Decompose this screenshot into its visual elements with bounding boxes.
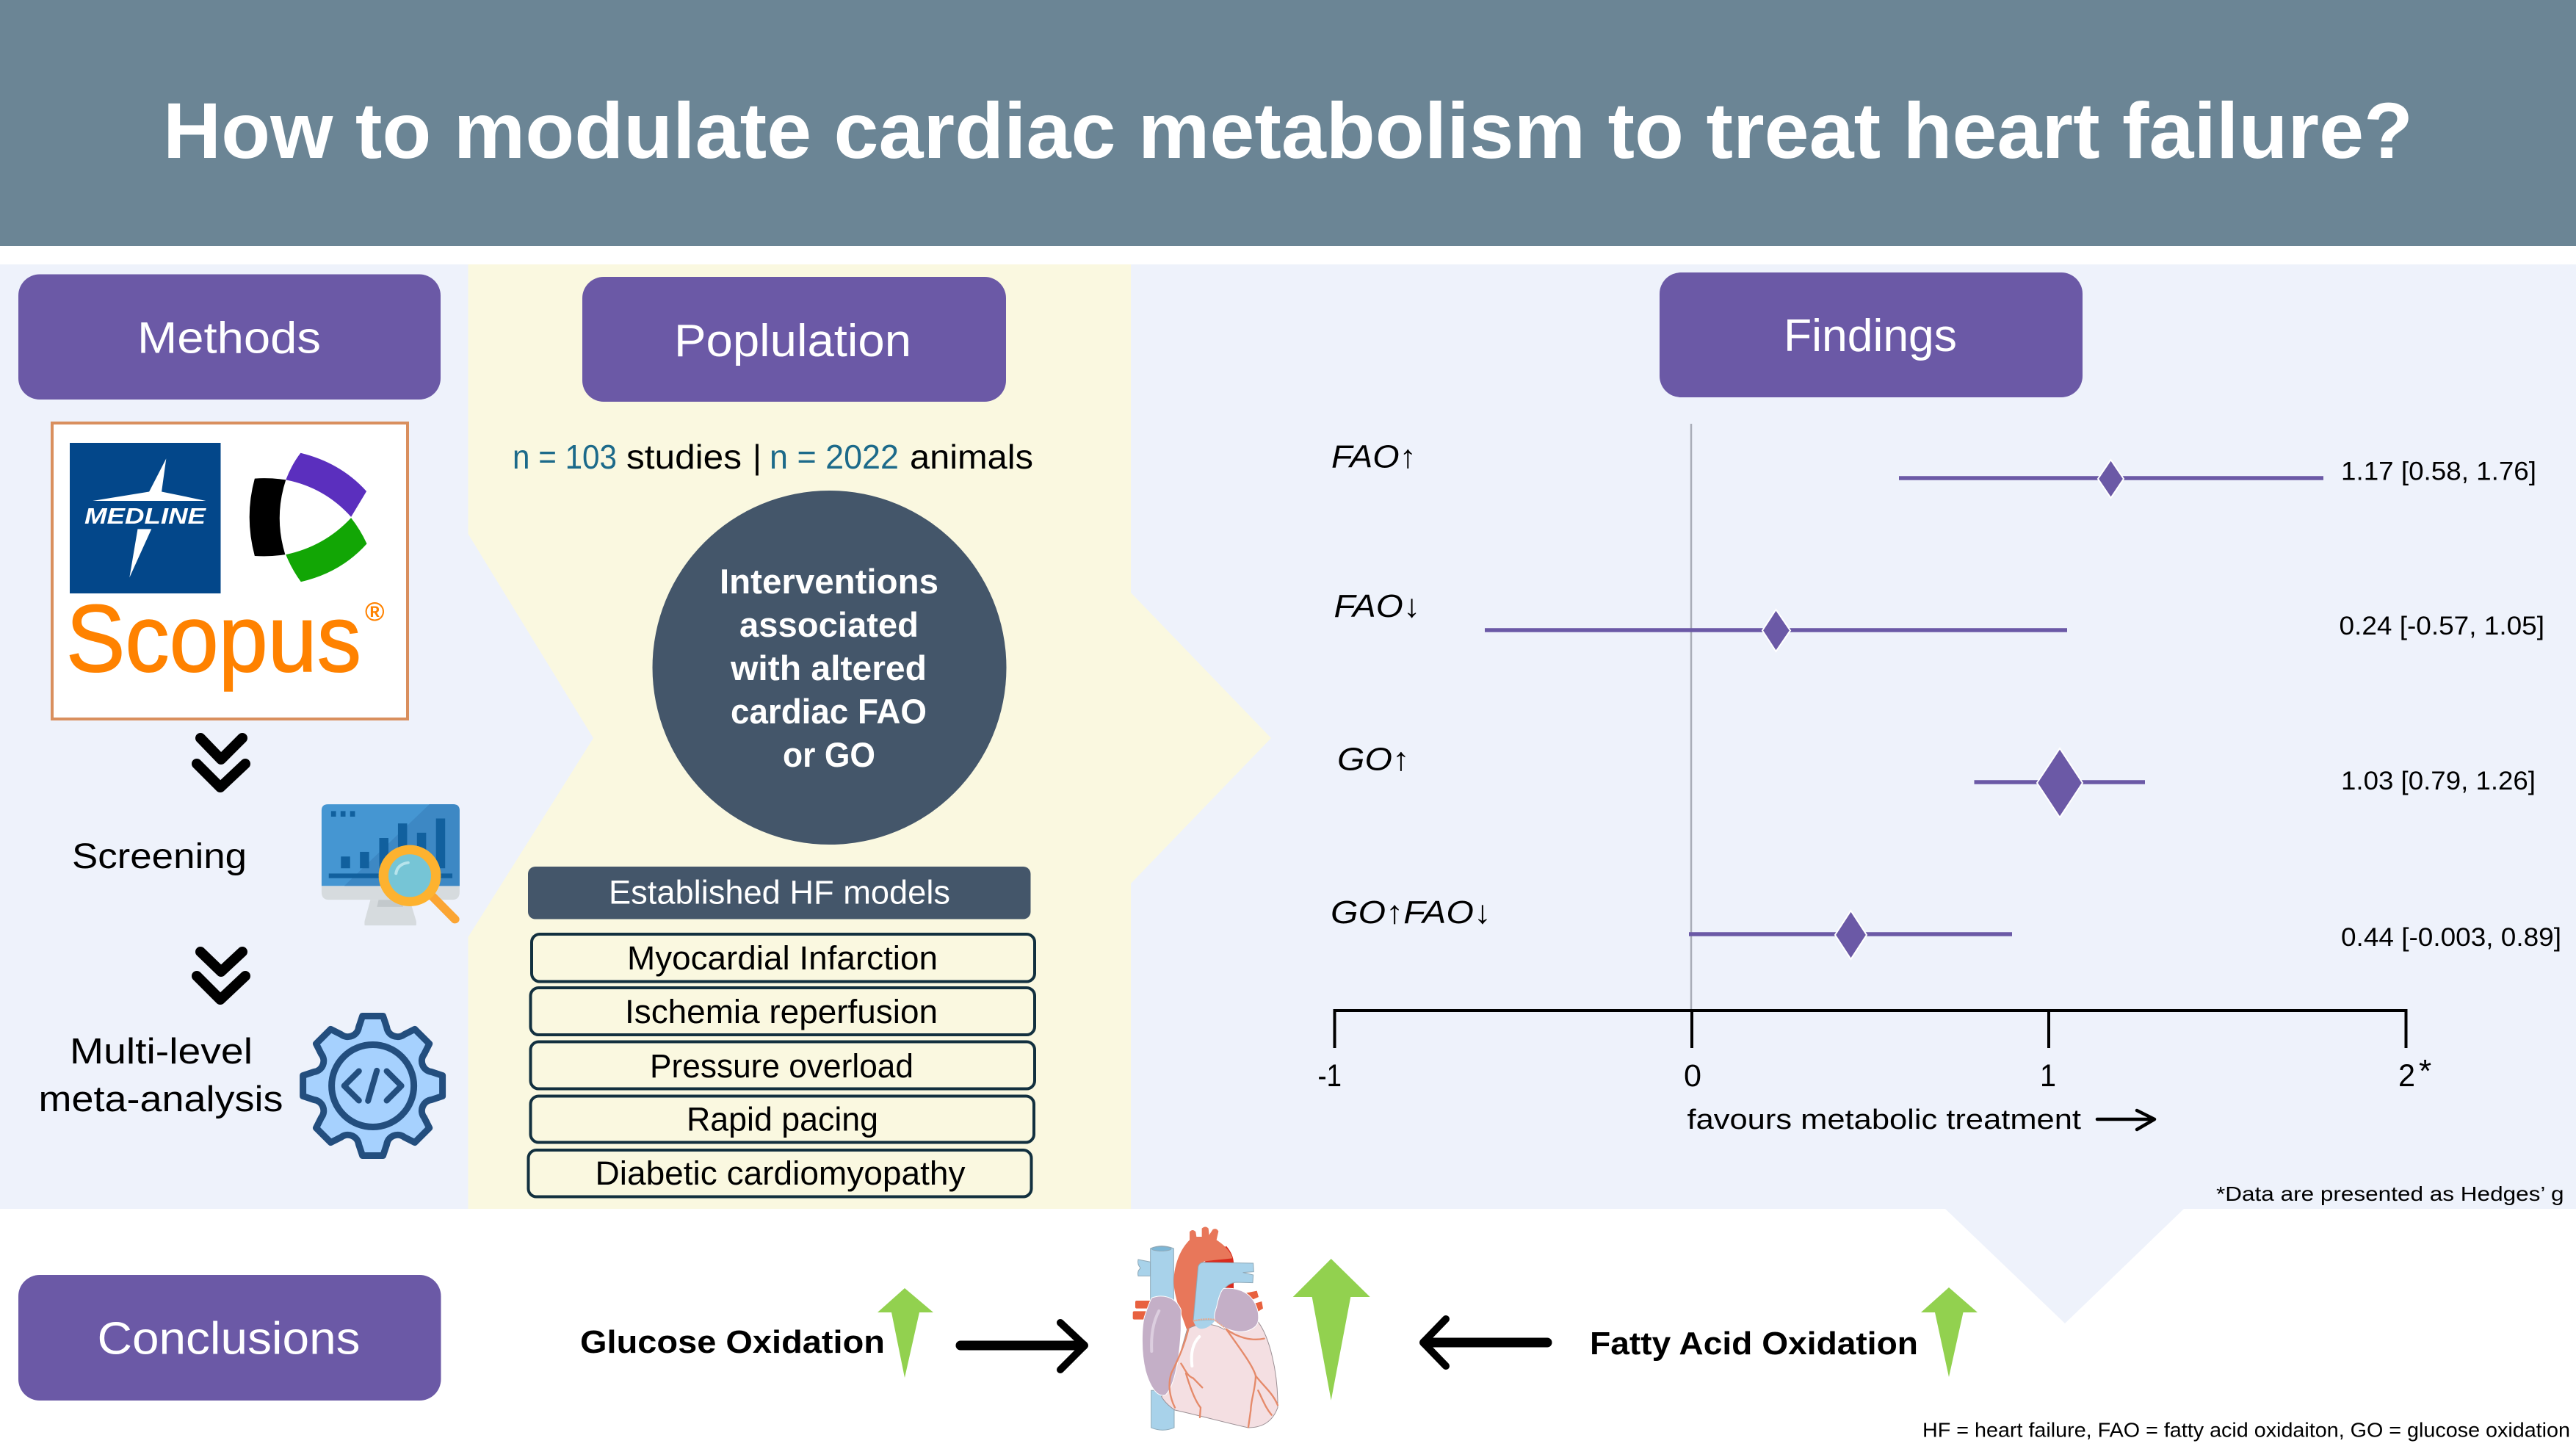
database logos box [52, 423, 408, 719]
icon: monitor with magnifier [322, 804, 460, 925]
population heading [582, 277, 1006, 402]
interventions circle [652, 491, 1006, 845]
panel: population [513, 277, 1035, 1197]
conclusions heading [18, 1275, 441, 1401]
panel: findings [1317, 272, 2564, 1205]
Hedges g footnote: *Data are presented as Hedges’ g [2216, 1182, 2564, 1205]
panel: population yellow chevron [468, 264, 1271, 1209]
findings heading [1660, 272, 2083, 397]
multi-level meta-analysis label: Multi-level [70, 1032, 253, 1072]
population heading: Poplulation [674, 316, 911, 366]
conclusions heading: Conclusions [97, 1313, 360, 1365]
forest plot [1317, 424, 2564, 1205]
model: ischemia reperfusion [530, 988, 1035, 1035]
icon: Medline logo: MEDLINE [84, 503, 207, 529]
row: GO up: GO↑ [1337, 742, 1410, 777]
row: GO up FAO down: GO↑FAO↓ [1331, 895, 1491, 931]
sample size line: n = 103 [513, 438, 617, 476]
established HF models header [528, 867, 1031, 919]
x axis [1317, 1011, 2431, 1094]
arrow: fatty acid oxidation up [1921, 1287, 1978, 1377]
interventions circle: cardiac FAO [731, 692, 927, 731]
model: pressure overload [530, 1041, 1035, 1088]
icon: Web of Science style tri-colour logo [250, 453, 367, 582]
Scopus wordmark: ® [365, 596, 385, 626]
sample size line: | [753, 438, 761, 476]
HF model list [529, 934, 1035, 1197]
row: GO up: 1.03 [0.79, 1.26] [2341, 767, 2536, 795]
methods heading: Methods [137, 313, 321, 363]
multi-level meta-analysis label: meta-analysis [38, 1080, 283, 1119]
header band with title [0, 0, 2576, 246]
icon: Medline logo [70, 443, 220, 593]
arrow: heart metabolism up [1293, 1259, 1370, 1401]
methods heading [18, 275, 441, 400]
icon: double chevron down [197, 738, 245, 787]
x axis: -1 [1317, 1058, 1342, 1094]
model: myocardial infarction: Myocardial Infarction [627, 939, 938, 977]
axis direction label and arrow: favours metabolic treatment [1687, 1105, 2081, 1135]
x axis: 2 [2398, 1058, 2415, 1094]
row: FAO down: 0.24 [-0.57, 1.05] [2340, 612, 2544, 640]
interventions circle: with altered [730, 648, 927, 687]
established HF models header: Established HF models [609, 874, 950, 911]
row: FAO down [1334, 588, 2544, 651]
row: FAO up [1331, 439, 2536, 498]
abbreviations footnote: HF = heart failure, FAO = fatty acid oxidaiton, GO = glucose oxidation [1922, 1419, 2570, 1441]
x axis: 1 [2040, 1058, 2056, 1094]
model: pressure overload: Pressure overload [650, 1047, 913, 1085]
glucose oxidation label: Glucose Oxidation [580, 1324, 885, 1360]
icon: gear with code symbol [303, 1016, 443, 1156]
x axis: 0 [1684, 1058, 1701, 1094]
interventions circle: Interventions [720, 562, 938, 601]
model: rapid pacing: Rapid pacing [687, 1100, 878, 1138]
row: FAO up: 1.17 [0.58, 1.76] [2341, 457, 2536, 486]
model: myocardial infarction [532, 934, 1035, 981]
fatty acid oxidation label: Fatty Acid Oxidation [1590, 1326, 1918, 1362]
multi-level meta-analysis label [38, 1032, 283, 1119]
panel: conclusions [18, 1226, 2570, 1441]
row: GO up [1337, 742, 2536, 817]
model: rapid pacing [530, 1096, 1034, 1143]
sample size line: n = 2022 [770, 438, 899, 476]
model: ischemia reperfusion: Ischemia reperfusion [625, 993, 938, 1030]
findings heading: Findings [1784, 311, 1957, 361]
row: FAO up: FAO↑ [1331, 439, 1417, 474]
arrow: glucose oxidation up [878, 1288, 933, 1378]
screening label: Screening [72, 837, 247, 876]
model: diabetic cardiomyopathy [529, 1150, 1031, 1197]
x axis: * [2419, 1053, 2431, 1089]
row: FAO down: FAO↓ [1334, 588, 1420, 624]
arrow: fatty acid to heart [1423, 1319, 1547, 1366]
icon: heart anatomy [1133, 1226, 1278, 1430]
arrow: glucose to heart [960, 1323, 1085, 1370]
Scopus wordmark: Scopus [66, 585, 361, 692]
interventions circle: associated [739, 605, 919, 644]
interventions circle: or GO [783, 735, 875, 774]
header band with title: How to modulate cardiac metabolism to treat heart failure? [163, 86, 2413, 175]
sample size line [513, 438, 1033, 476]
model: diabetic cardiomyopathy: Diabetic cardiomyopathy [595, 1154, 966, 1192]
panel: methods [18, 275, 460, 1156]
row: GO up FAO down [1331, 895, 2561, 959]
sample size line: studies [626, 438, 742, 476]
icon: double chevron down [197, 952, 245, 1000]
sample size line: animals [910, 438, 1033, 476]
panel: blue background with downward pointer [0, 264, 2576, 1323]
row: GO up FAO down: 0.44 [-0.003, 0.89] [2341, 923, 2561, 952]
